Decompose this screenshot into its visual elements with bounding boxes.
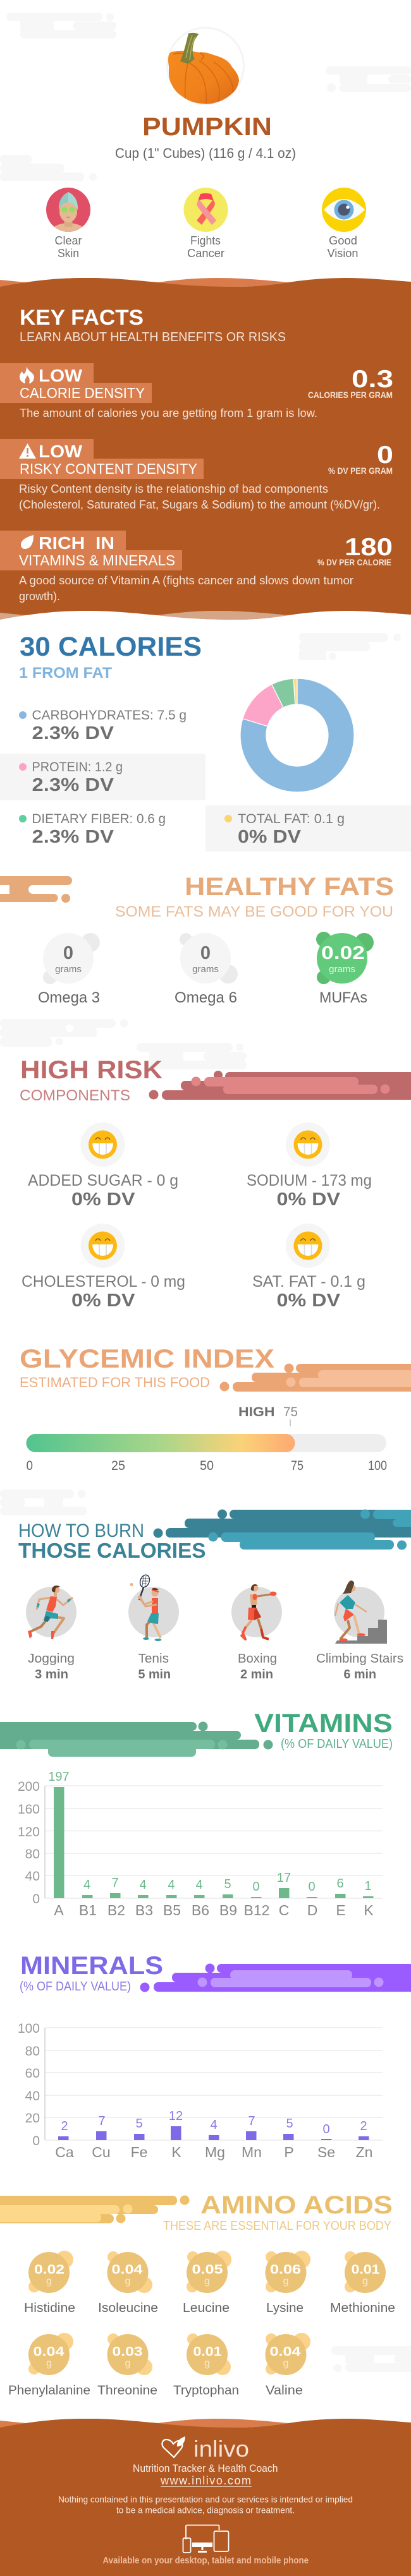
bar chart: minerals: 20: [25, 2111, 40, 2126]
icon: devices: [183, 2525, 229, 2553]
amino: tryptophan: 0.01: [193, 2345, 222, 2359]
amino: valine: [266, 2333, 310, 2398]
risk: saturated fat: [252, 1224, 365, 1311]
bar chart: minerals: 4: [210, 2118, 218, 2132]
fat: omega 6: grams: [192, 964, 219, 975]
fat: MUFAs: [316, 932, 374, 1006]
fact: calorie density: The amount of calories you are getting from 1 gram is low.: [20, 407, 317, 419]
bar chart: minerals: [18, 2021, 383, 2160]
amino: phenylalanine: g: [46, 2358, 52, 2369]
fact: risky content density: Risky Content density is the relationship of bad components: [19, 483, 328, 495]
macro: carbohydrates: [19, 708, 187, 743]
fat: omega 6: [175, 933, 238, 1006]
macro: protein: 2.3% DV: [32, 775, 114, 795]
serving size: Cup (1" Cubes) (116 g / 4.1 oz): [115, 145, 296, 161]
benefit: fights cancer: Cancer: [187, 247, 224, 260]
exercise: boxing: Boxing: [238, 1652, 277, 1666]
fat: MUFAs: grams: [329, 964, 355, 975]
amino: isoleucine: Isoleucine: [98, 2301, 158, 2315]
fact: calorie density: [0, 363, 393, 419]
glycemic scale: 25: [111, 1459, 125, 1473]
background clouds: high risk: [0, 1019, 247, 1069]
amino: threonine: Threonine: [97, 2384, 157, 2398]
fact: rich in vitamins and minerals: growth).: [19, 590, 60, 603]
heading: how to burn: HOW TO BURN: [18, 1520, 144, 1541]
header decoration: [220, 1363, 411, 1392]
footer wave: [0, 2419, 411, 2431]
panel: vitamins: [0, 1708, 393, 1918]
amino: valine: 0.04: [269, 2345, 301, 2359]
header decoration: [0, 876, 72, 903]
risk: cholesterol: [21, 1224, 185, 1311]
heading: amino acids: AMINO ACIDS: [200, 2191, 393, 2219]
bar chart: minerals: 12: [169, 2109, 183, 2123]
fact: risky content density: RISKY CONTENT DENSITY: [20, 460, 197, 477]
amino: lysine: [266, 2251, 310, 2315]
fact: risky content density: LOW: [39, 442, 83, 461]
panel: high risk components: [20, 1056, 411, 1311]
benefit: good vision: Vision: [328, 247, 358, 260]
heading: minerals: MINERALS: [20, 1952, 163, 1980]
heading: high risk: HIGH RISK: [20, 1056, 163, 1084]
fact: rich in vitamins and minerals: [0, 531, 393, 603]
bar chart: minerals: 2: [61, 2119, 68, 2133]
bar chart: vitamins: 200: [18, 1779, 40, 1794]
macro: total fat: TOTAL FAT: 0.1 g: [238, 812, 345, 826]
subheading: (% OF DAILY VALUE): [20, 1980, 131, 1994]
panel: glycemic index: [20, 1344, 411, 1473]
bar chart: vitamins: 4: [83, 1878, 90, 1892]
glycemic value label: HIGH: [238, 1405, 274, 1419]
amino: isoleucine: 0.04: [111, 2263, 143, 2277]
amino: lysine: Lysine: [266, 2301, 304, 2315]
bar chart: minerals: 80: [25, 2044, 40, 2059]
glycemic scale: 0: [27, 1459, 33, 1473]
bar chart: minerals: K: [171, 2144, 181, 2160]
glycemic scale: 100: [368, 1459, 387, 1473]
header decoration: [149, 1071, 411, 1100]
amino: histidine: g: [46, 2276, 52, 2287]
risk: added sugar: 0% DV: [71, 1189, 135, 1210]
fat: omega 3: [38, 933, 100, 1006]
bar chart: vitamins: B5: [163, 1902, 181, 1918]
header decoration: [0, 2196, 190, 2224]
amino: threonine: [97, 2333, 157, 2398]
macro: protein: [19, 760, 123, 795]
bar chart: vitamins: C: [279, 1902, 289, 1918]
bar chart: minerals: 5: [135, 2117, 143, 2131]
macro: protein: PROTEIN: 1.2 g: [32, 760, 123, 774]
subheading: LEARN ABOUT HEALTH BENEFITS OR RISKS: [20, 330, 286, 344]
fat: omega 3: 0: [63, 943, 73, 963]
bar chart: minerals: 100: [18, 2021, 40, 2036]
exercise: tennis: 5 min: [138, 1668, 171, 1682]
panel: minerals: [18, 1952, 411, 2160]
amino: tryptophan: Tryptophan: [173, 2384, 239, 2398]
heading: healthy fats: HEALTHY FATS: [185, 873, 394, 901]
tagline: Nutrition Tracker & Health Coach: [133, 2462, 278, 2474]
bar chart: minerals: Zn: [356, 2144, 372, 2160]
risk: saturated fat: SAT. FAT - 0.1 g: [252, 1273, 365, 1291]
heading: key facts: KEY FACTS: [20, 306, 144, 330]
panel: calories: [0, 632, 411, 852]
logo: heart and leaf: [162, 2436, 185, 2457]
heading: those calories: THOSE CALORIES: [18, 1539, 206, 1562]
bar chart: minerals: Mn: [242, 2144, 262, 2160]
risk: cholesterol: CHOLESTEROL - 0 mg: [21, 1273, 185, 1291]
amino: leucine: g: [204, 2276, 210, 2287]
amino: isoleucine: [98, 2251, 158, 2315]
fat: MUFAs: MUFAs: [319, 989, 367, 1006]
bar chart: minerals: Se: [317, 2144, 335, 2160]
benefit: clear skin: [46, 188, 90, 260]
bar chart: vitamins: 1: [364, 1879, 372, 1893]
glycemic scale: 50: [200, 1459, 214, 1473]
bar chart: minerals: Ca: [55, 2144, 74, 2160]
risk: added sugar: [28, 1122, 178, 1210]
exercise: jogging: 3 min: [35, 1668, 68, 1682]
bar chart: minerals: 7: [98, 2114, 106, 2128]
header decoration: [153, 1510, 411, 1550]
header decoration: [0, 1722, 273, 1757]
bar chart: minerals: 40: [25, 2089, 40, 2104]
exercise: jogging: [26, 1586, 77, 1682]
bar chart: vitamins: 40: [25, 1869, 40, 1884]
exercise: boxing: [231, 1584, 282, 1682]
risk: cholesterol: 0% DV: [71, 1291, 135, 1311]
glycemic scale: [27, 1459, 387, 1473]
disclaimer: to be a medical advice, diagnosis or treatment.: [116, 2505, 295, 2515]
website: www.inlivo.com: [160, 2474, 251, 2487]
bar chart: minerals: Fe: [131, 2144, 147, 2160]
glycemic value label: 75: [283, 1405, 298, 1419]
fact: risky content density: (Cholesterol, Saturated Fat, Sugars & Sodium) to the amount (%DV/gr).: [19, 498, 380, 511]
bar chart: vitamins: E: [336, 1902, 346, 1918]
macro: carbohydrates: CARBOHYDRATES: 7.5 g: [32, 708, 187, 723]
bar chart: vitamins: 197: [48, 1770, 70, 1784]
macro: dietary fiber: [19, 812, 166, 847]
subheading: components: COMPONENTS: [20, 1087, 130, 1104]
bottom wave: [0, 611, 411, 620]
benefit: fights cancer: Fights: [190, 234, 221, 247]
subheading: (% OF DAILY VALUE): [281, 1737, 393, 1751]
bar chart: vitamins: B2: [107, 1902, 125, 1918]
exercise: climbing stairs: [316, 1580, 403, 1682]
title: PUMPKIN: [142, 113, 272, 141]
bar chart: minerals: 0: [322, 2122, 330, 2136]
donut chart: [240, 678, 354, 792]
benefit: clear skin: Skin: [58, 247, 79, 260]
benefit: fights cancer: [183, 188, 228, 260]
bar chart: minerals: Cu: [92, 2144, 111, 2160]
glycemic value label: [238, 1405, 298, 1426]
amino: lysine: g: [283, 2276, 288, 2287]
bar chart: vitamins: B12: [244, 1902, 269, 1918]
bar chart: vitamins: 6: [336, 1877, 344, 1891]
subheading: ESTIMATED FOR THIS FOOD: [20, 1375, 210, 1390]
risk: sodium: SODIUM - 173 mg: [247, 1172, 372, 1189]
amino: leucine: 0.05: [192, 2263, 223, 2277]
bar chart: vitamins: 4: [139, 1878, 147, 1892]
bar chart: vitamins: 120: [18, 1825, 40, 1839]
amino: phenylalanine: Phenylalanine: [8, 2384, 90, 2398]
fat: omega 3: grams: [55, 964, 82, 975]
subheading: SOME FATS MAY BE GOOD FOR YOU: [115, 903, 393, 920]
bar chart: vitamins: 7: [111, 1876, 119, 1890]
bar chart: vitamins: 17: [277, 1871, 291, 1885]
background clouds: header: [0, 13, 411, 181]
exercise: tennis: Tenis: [138, 1652, 169, 1666]
header decoration: [140, 1963, 411, 1992]
bar chart: vitamins: K: [364, 1902, 374, 1918]
fact: rich in vitamins and minerals: 180: [345, 534, 393, 561]
amino: lysine: 0.06: [270, 2263, 301, 2277]
benefit: clear skin: Clear: [54, 234, 82, 247]
panel: how to burn calories: [0, 1490, 411, 1682]
logo wordmark: inlivo: [193, 2436, 249, 2462]
risk: added sugar: ADDED SUGAR - 0 g: [28, 1172, 178, 1189]
amino: valine: g: [283, 2358, 288, 2369]
risk: sodium: 0% DV: [277, 1189, 341, 1210]
fact: risky content density: 0: [377, 442, 393, 469]
risk: sodium: [247, 1122, 372, 1210]
subheading: THESE ARE ESSENTIAL FOR YOUR BODY: [163, 2219, 391, 2233]
fact: risky content density: % DV PER GRAM: [328, 466, 393, 476]
heading: 30 calories: 30 CALORIES: [20, 632, 202, 662]
macro: carbohydrates: 2.3% DV: [32, 723, 114, 743]
amino: valine: Valine: [266, 2384, 303, 2398]
bar chart: minerals: 0: [32, 2134, 40, 2148]
amino: threonine: g: [125, 2358, 130, 2369]
exercise: tennis: [128, 1574, 179, 1682]
fact: risky content density: [0, 439, 393, 511]
bar chart: vitamins: 0: [308, 1880, 316, 1894]
amino: leucine: [183, 2251, 231, 2315]
exercise: jogging: Jogging: [28, 1652, 75, 1666]
amino: isoleucine: g: [125, 2276, 130, 2287]
heading: glycemic index: GLYCEMIC INDEX: [20, 1344, 274, 1373]
bar chart: vitamins: B3: [135, 1902, 153, 1918]
risk: saturated fat: 0% DV: [277, 1291, 341, 1311]
bar chart: minerals: P: [284, 2144, 294, 2160]
bar chart: vitamins: A: [54, 1902, 64, 1918]
fact: calorie density: CALORIE DENSITY: [20, 385, 145, 401]
bar chart: minerals: 2: [360, 2119, 367, 2133]
amino: tryptophan: [173, 2333, 239, 2398]
bar chart: vitamins: D: [307, 1902, 317, 1918]
bar chart: vitamins: 0: [252, 1880, 260, 1894]
fact: rich in vitamins and minerals: VITAMINS & MINERALS: [19, 552, 175, 569]
bar chart: minerals: Mg: [205, 2144, 225, 2160]
fact: calorie density: 0.3: [352, 366, 393, 393]
bar chart: minerals: 60: [25, 2066, 40, 2081]
amino: methionine: [330, 2251, 395, 2315]
bar chart: minerals: 7: [248, 2114, 255, 2128]
bar chart: vitamins: B6: [192, 1902, 209, 1918]
amino: leucine: Leucine: [183, 2301, 230, 2315]
panel: amino acids: [0, 2191, 411, 2398]
panel: healthy fats: [0, 873, 394, 1006]
amino: methionine: 0.01: [352, 2263, 380, 2277]
amino: phenylalanine: [8, 2333, 90, 2398]
bar chart: vitamins: 5: [224, 1877, 231, 1891]
fact: calorie density: CALORIES PER GRAM: [308, 390, 393, 400]
panel: footer: [0, 2419, 411, 2576]
fact: rich in vitamins and minerals: RICH IN: [39, 533, 114, 553]
macro: dietary fiber: 2.3% DV: [32, 827, 114, 847]
fat: omega 6: 0: [200, 943, 211, 963]
amino: histidine: Histidine: [24, 2301, 75, 2315]
top wave: [0, 278, 411, 291]
amino: phenylalanine: 0.04: [33, 2345, 64, 2359]
cloud decoration: [331, 2346, 411, 2373]
subheading: from fat: 1 FROM FAT: [19, 665, 112, 682]
bar chart: vitamins: B9: [219, 1902, 237, 1918]
macro: total fat: 0% DV: [238, 827, 302, 847]
amino: methionine: Methionine: [330, 2301, 395, 2315]
amino: histidine: [24, 2251, 75, 2315]
fat: omega 6: Omega 6: [175, 989, 237, 1006]
bar chart: vitamins: [18, 1770, 383, 1918]
fat: omega 3: Omega 3: [38, 989, 100, 1006]
bar chart: vitamins: 160: [18, 1802, 40, 1817]
pumpkin image: [167, 28, 244, 104]
bar chart: minerals: 5: [286, 2117, 293, 2131]
panel: key facts: [0, 278, 411, 620]
cloud decoration: [0, 1490, 87, 1515]
glycemic bar: [27, 1434, 386, 1452]
exercise: boxing: 2 min: [240, 1668, 273, 1682]
bar chart: vitamins: 4: [195, 1878, 203, 1892]
fact: calorie density: LOW: [39, 366, 83, 385]
bar chart: vitamins: 4: [168, 1878, 175, 1892]
disclaimer: Nothing contained in this presentation and our services is intended or implied: [58, 2494, 353, 2504]
benefit: good vision: Good: [329, 234, 357, 247]
heading: vitamins: VITAMINS: [254, 1708, 393, 1738]
exercise: climbing stairs: Climbing Stairs: [316, 1652, 403, 1666]
exercise: climbing stairs: 6 min: [344, 1668, 376, 1682]
macro: dietary fiber: DIETARY FIBER: 0.6 g: [32, 812, 166, 826]
availability note: Available on your desktop, tablet and mobile phone: [102, 2555, 309, 2566]
macro panel backgrounds: [0, 754, 411, 852]
amino: methionine: g: [362, 2276, 368, 2287]
bar chart: vitamins: 0: [32, 1892, 40, 1906]
amino: histidine: 0.02: [34, 2263, 64, 2277]
fact: rich in vitamins and minerals: A good source of Vitamin A (fights cancer and slows down tumor: [19, 574, 353, 587]
glycemic scale: 75: [291, 1459, 304, 1473]
bar chart: vitamins: B1: [79, 1902, 97, 1918]
fat: MUFAs: 0.02: [321, 943, 365, 963]
macro: total fat: [224, 812, 345, 847]
disclaimer: [58, 2494, 353, 2515]
bar chart: vitamins: 80: [25, 1847, 40, 1862]
amino: threonine: 0.03: [113, 2345, 143, 2359]
amino: tryptophan: g: [204, 2358, 210, 2369]
benefit: good vision: [322, 188, 366, 260]
cloud decoration: [299, 633, 401, 660]
fact: rich in vitamins and minerals: % DV PER CALORIE: [317, 557, 391, 567]
